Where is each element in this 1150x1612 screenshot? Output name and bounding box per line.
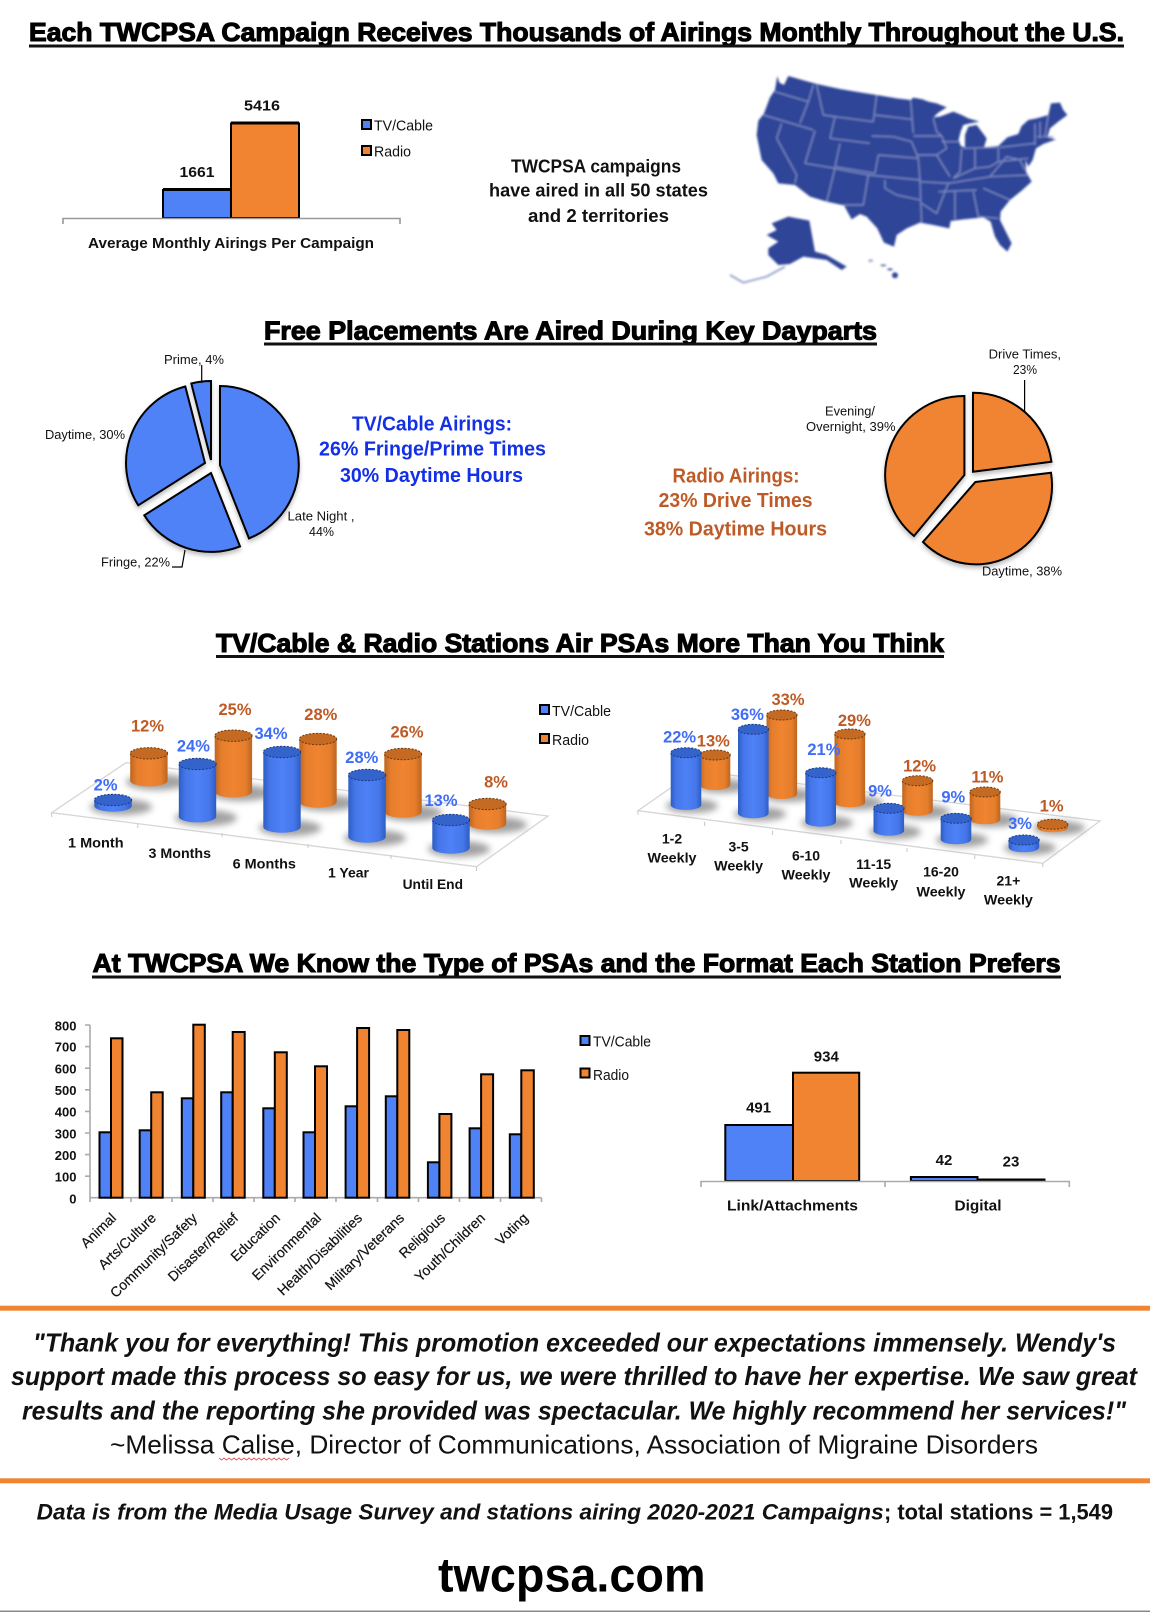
bar chart: PSA types: Religious [396, 1210, 448, 1261]
cylinder: Until End TV/Cable [432, 814, 470, 854]
title: type and format: At TWCPSA We Know the Type of PSAs and the Format Each Station Prefers [93, 948, 1061, 978]
legend: airings chart: TV/Cable [374, 119, 433, 135]
bar chart: PSA types: Youth/Children [411, 1210, 488, 1285]
bar chart: format preference: 42 [936, 1152, 952, 1169]
map: United States [730, 76, 1067, 283]
bar chart: PSA types: Health/Disabilities [274, 1210, 365, 1298]
cylinder: 21+ Weekly TV/Cable [1009, 835, 1039, 852]
3D bar chart: weekly frequency: 9% [941, 789, 966, 807]
3D bar chart: duration of airing: 6 Months [233, 855, 296, 871]
bar chart: PSA types: 200 [55, 1148, 76, 1163]
3D bar chart: duration of airing: 34% [254, 725, 288, 743]
3D bar chart: weekly frequency: 11% [971, 769, 1004, 787]
testimonial quote: results and the reporting she provided was spectacular. We highly recommend her services!" [22, 1395, 1127, 1425]
3D bar chart: duration of airing: Until End [403, 876, 463, 892]
3D bar chart: weekly frequency: Weekly [714, 858, 763, 874]
3D bar chart: weekly frequency [638, 691, 1100, 907]
divider: top of testimonial [0, 1306, 1150, 1311]
cylinder: 1 Year TV/Cable [348, 769, 386, 843]
bar chart: average monthly airings: 1661 [180, 164, 214, 181]
3D bar chart: duration of airing: 12% [131, 718, 164, 736]
3D bar chart: weekly frequency: 1-2 [662, 830, 682, 846]
3D bar chart: weekly frequency: 12% [903, 758, 936, 776]
bar chart: average monthly airings: 5416 [244, 98, 280, 115]
bar chart: PSA types: 100 [55, 1170, 76, 1185]
bar chart: PSA types: Disaster/Relief [164, 1210, 241, 1284]
legend: type and format charts [580, 1035, 651, 1084]
cylinder: 1 Month TV/Cable [94, 794, 132, 812]
bar chart: PSA types: 300 [55, 1126, 76, 1141]
pie chart: radio dayparts: Evening/ [825, 405, 876, 419]
cylinder: 1 Year Radio [384, 748, 422, 818]
legend: stations charts: Radio [552, 733, 589, 749]
pie chart: radio dayparts: Daytime, 38% [982, 564, 1062, 578]
3D bar chart: duration of airing: 3 Months [149, 845, 211, 861]
bar chart: average monthly airings: Average Monthly Airings Per Campaign [88, 236, 374, 252]
pie chart: TV/Cable dayparts: Prime, 4% [164, 353, 224, 367]
text block: states and territories: and 2 territories [528, 206, 669, 226]
3D bar chart: duration of airing: 8% [484, 774, 508, 792]
testimonial quote: "Thank you for everything! This promotion exceeded our expectations immensely. Wendy's [33, 1328, 1116, 1358]
cylinder: 21+ Weekly Radio [1037, 819, 1068, 832]
3D bar chart: weekly frequency: 13% [697, 733, 730, 751]
3D bar chart: duration of airing: 1 Month [68, 834, 124, 850]
cylinder: 6-10 Weekly Radio [834, 729, 865, 807]
3D bar chart: weekly frequency: 3% [1008, 815, 1032, 833]
3D bar chart: weekly frequency: 9% [868, 783, 892, 801]
3D bar chart: weekly frequency: 21+ [997, 873, 1020, 889]
cylinder: 11-15 Weekly Radio [902, 776, 933, 816]
3D bar chart: duration of airing: 1 Year [328, 864, 370, 880]
3D bar chart: weekly frequency: Weekly [782, 866, 831, 882]
cylinder: 1-2 Weekly Radio [700, 750, 730, 790]
testimonial quote [11, 1328, 1138, 1460]
3D bar chart: weekly frequency: Weekly [916, 884, 966, 900]
3D bar chart: duration of airing: 24% [177, 738, 210, 756]
3D bar chart: weekly frequency: 21% [807, 741, 841, 759]
cylinder: 1 Month Radio [130, 748, 168, 786]
3D bar chart: weekly frequency: 11-15 [856, 856, 891, 872]
cylinder: 3 Months Radio [215, 730, 252, 797]
bar chart: PSA types: Arts/Culture [95, 1210, 159, 1273]
text block: states and territories: TWCPSA campaigns [511, 157, 681, 177]
3D bar chart: duration of airing: 28% [304, 706, 338, 724]
bar chart: format preference: 491 [746, 1100, 771, 1117]
3D bar chart: duration of airing: 26% [390, 724, 424, 742]
bar chart: format preference [701, 1049, 1069, 1215]
3D bar chart: weekly frequency: Weekly [648, 850, 697, 866]
text block: radio airings: 23% Drive Times [659, 490, 813, 512]
bar chart: PSA types: Environmental [249, 1210, 324, 1283]
pie chart: TV/Cable dayparts: Fringe, 22% [101, 556, 170, 570]
text block: TV/Cable airings: TV/Cable Airings: [352, 414, 512, 436]
3D bar chart: duration of airing: 2% [94, 777, 118, 795]
text block: radio airings: 38% Daytime Hours [644, 519, 827, 541]
3D bar chart: weekly frequency: Weekly [849, 875, 898, 891]
3D bar chart: duration of airing: 13% [424, 792, 458, 810]
bar chart: PSA types: Animal [77, 1210, 119, 1251]
text block: TV/Cable airings: 30% Daytime Hours [340, 465, 523, 487]
bar chart: PSA types: Community/Safety [107, 1210, 200, 1301]
bar chart: average monthly airings [63, 98, 400, 252]
cylinder: 3 Months TV/Cable [179, 758, 216, 822]
bar chart: PSA types: Voting [492, 1210, 531, 1248]
bar chart: PSA types [55, 1019, 542, 1301]
text block: TV/Cable airings [319, 414, 546, 487]
pie chart: TV/Cable dayparts [45, 353, 354, 570]
3D bar chart: weekly frequency: 1% [1040, 798, 1064, 816]
text block: radio airings: Radio Airings: [672, 466, 800, 488]
legend: airings chart [362, 119, 433, 161]
cylinder: 1-2 Weekly TV/Cable [671, 748, 701, 810]
bar chart: PSA types: 0 [69, 1191, 76, 1206]
cylinder: 3-5 Weekly TV/Cable [738, 724, 769, 818]
bar chart: format preference: 23 [1003, 1154, 1019, 1171]
pie chart: radio dayparts: Drive Times, [989, 347, 1061, 361]
cylinder: 11-15 Weekly TV/Cable [874, 803, 904, 836]
testimonial quote: ~Melissa Calise, Director of Communications, Association of Migraine Disorders [110, 1429, 1038, 1459]
cylinder: 16-20 Weekly TV/Cable [941, 813, 971, 844]
bar chart: PSA types: 400 [55, 1105, 76, 1120]
title: thousands of airings: Each TWCPSA Campaign Receives Thousands of Airings Monthly Throughout the U.S. [29, 17, 1124, 47]
pie chart: TV/Cable dayparts: Daytime, 30% [45, 428, 125, 442]
text block: states and territories: have aired in all 50 states [489, 181, 708, 201]
text block: radio airings [644, 466, 827, 541]
3D bar chart: weekly frequency: 22% [663, 729, 696, 747]
text block: TV/Cable airings: 26% Fringe/Prime Times [319, 439, 546, 461]
data source note: Data is from the Media Usage Survey and stations airing 2020-2021 Campaigns [37, 1499, 884, 1524]
cylinder: Until End Radio [469, 798, 506, 830]
divider: bottom of testimonial [0, 1478, 1150, 1483]
testimonial quote: support made this process so easy for us, we were thrilled to have her expertise. We saw great [11, 1361, 1138, 1391]
pie chart: TV/Cable dayparts: Late Night , [288, 510, 354, 524]
legend: airings chart: Radio [374, 145, 411, 161]
cylinder: 6 Months TV/Cable [263, 746, 301, 833]
3D bar chart: duration of airing [52, 701, 548, 892]
3D bar chart: weekly frequency: Weekly [984, 891, 1033, 907]
3D bar chart: duration of airing: 25% [218, 701, 252, 719]
bar chart: format preference: Link/Attachments [727, 1198, 858, 1215]
pie chart: radio dayparts: 23% [1013, 363, 1037, 377]
bar chart: format preference: Digital [954, 1198, 1002, 1215]
3D bar chart: weekly frequency: 16-20 [923, 864, 959, 880]
bar chart: PSA types: Military/Veterans [322, 1210, 407, 1293]
bar chart: PSA types: 500 [55, 1083, 76, 1098]
3D bar chart: weekly frequency: 6-10 [792, 848, 820, 864]
pie chart: radio dayparts [806, 347, 1062, 578]
title: key dayparts: Free Placements Are Aired During Key Dayparts [264, 316, 877, 346]
bar chart: PSA types: 600 [55, 1061, 76, 1076]
cylinder: 3-5 Weekly Radio [766, 710, 797, 799]
text block: states and territories [489, 157, 708, 226]
legend: stations charts: TV/Cable [552, 704, 611, 720]
title: stations air PSAs: TV/Cable & Radio Stations Air PSAs More Than You Think [216, 628, 945, 658]
bar chart: PSA types: 700 [55, 1040, 76, 1055]
3D bar chart: weekly frequency: 36% [731, 706, 764, 724]
bar chart: PSA types: Education [227, 1210, 283, 1264]
3D bar chart: weekly frequency: 33% [771, 691, 805, 709]
website address: twcpsa.com [438, 1550, 706, 1603]
3D bar chart: duration of airing: 28% [345, 749, 379, 767]
bar chart: format preference: 934 [814, 1049, 839, 1066]
cylinder: 16-20 Weekly Radio [970, 787, 1000, 824]
data source note: ; total stations = 1,549 [884, 1499, 1113, 1524]
pie chart: TV/Cable dayparts: 44% [309, 525, 334, 539]
legend: stations charts [540, 704, 611, 749]
pie chart: radio dayparts: Overnight, 39% [806, 420, 896, 434]
bar chart: PSA types: 800 [55, 1019, 76, 1034]
cylinder: 6 Months Radio [299, 733, 337, 808]
3D bar chart: weekly frequency: 3-5 [728, 839, 749, 855]
legend: type and format charts: Radio [593, 1068, 629, 1084]
cylinder: 6-10 Weekly TV/Cable [805, 768, 836, 827]
3D bar chart: weekly frequency: 29% [838, 712, 871, 730]
legend: type and format charts: TV/Cable [593, 1035, 651, 1051]
